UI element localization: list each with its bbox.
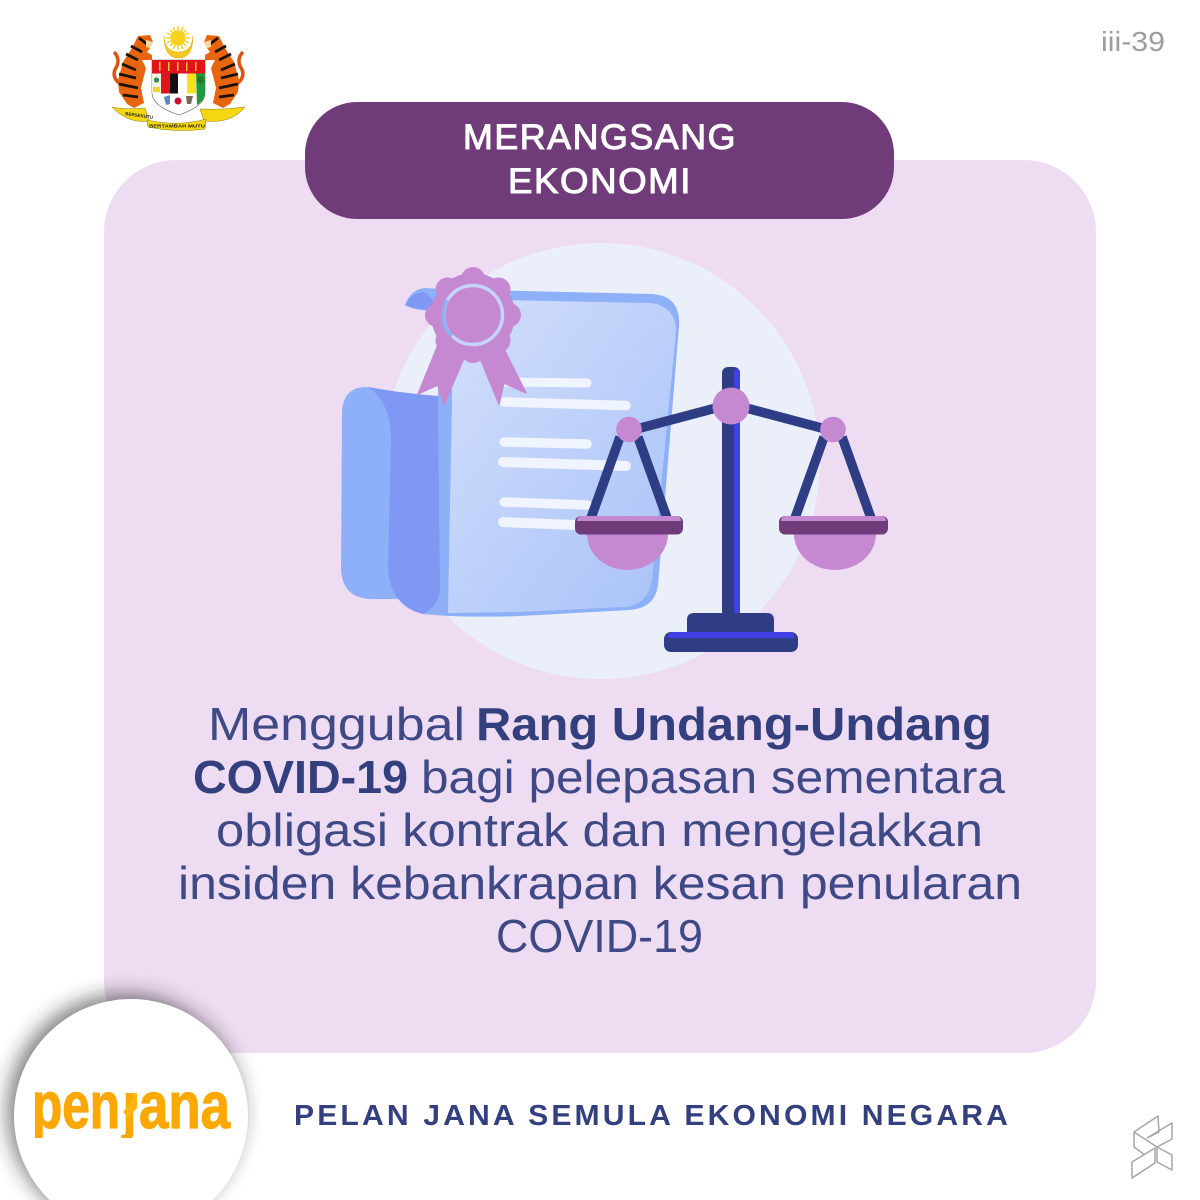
body text: insiden kebankrapan kesan penularan (178, 857, 1022, 909)
left tiger (114, 35, 153, 108)
icon: Malaysian coat of arms (112, 26, 245, 131)
body text: COVID-19 (193, 751, 408, 803)
right tiger (204, 35, 243, 108)
icon: paper edge flap (405, 288, 440, 310)
body text: bagi pelepasan sementara (421, 751, 1005, 803)
penjana logo badge: ana (139, 1068, 231, 1142)
body text: Rang Undang-Undang (476, 698, 992, 750)
rolled paper (341, 387, 405, 599)
body text: obligasi kontrak dan mengelakkan (216, 804, 983, 856)
penjana logo badge: pen (32, 1068, 120, 1142)
scale post (722, 367, 740, 617)
penjana logo badge: j (120, 1068, 137, 1142)
icon: ribbon rosette (418, 267, 526, 405)
paper text lines (503, 382, 626, 526)
motto ribbon (112, 107, 245, 131)
icon: balance scales (575, 367, 888, 652)
left pan (575, 516, 683, 570)
penjana logo badge (8, 994, 248, 1200)
footer tagline: PELAN JANA SEMULA EKONOMI NEGARA (294, 1100, 1011, 1132)
background circle (382, 243, 820, 679)
body text (178, 698, 1022, 962)
heading pill: EKONOMI (508, 162, 692, 201)
paper sheet (423, 289, 679, 617)
panel: main lilac card (104, 160, 1096, 1053)
scale pivots (712, 388, 750, 424)
icon: bottom-right geometric logo (1132, 1116, 1172, 1178)
document (341, 288, 679, 617)
body text: Menggubal (208, 698, 465, 750)
scale base (664, 613, 798, 652)
illustration: document and scales (341, 243, 888, 679)
scale beam and strings (591, 404, 871, 518)
shield (152, 60, 205, 115)
motto ribbon: BERTAMBAH MUTU (149, 124, 205, 128)
motto ribbon: BERSEKUTU (125, 111, 153, 120)
right pan (779, 516, 888, 570)
body text: COVID-19 (496, 910, 703, 962)
heading pill: MERANGSANG (463, 118, 737, 157)
page number: iii-39 (1101, 26, 1165, 57)
sun and crescent (164, 26, 193, 58)
heading pill (305, 102, 894, 219)
